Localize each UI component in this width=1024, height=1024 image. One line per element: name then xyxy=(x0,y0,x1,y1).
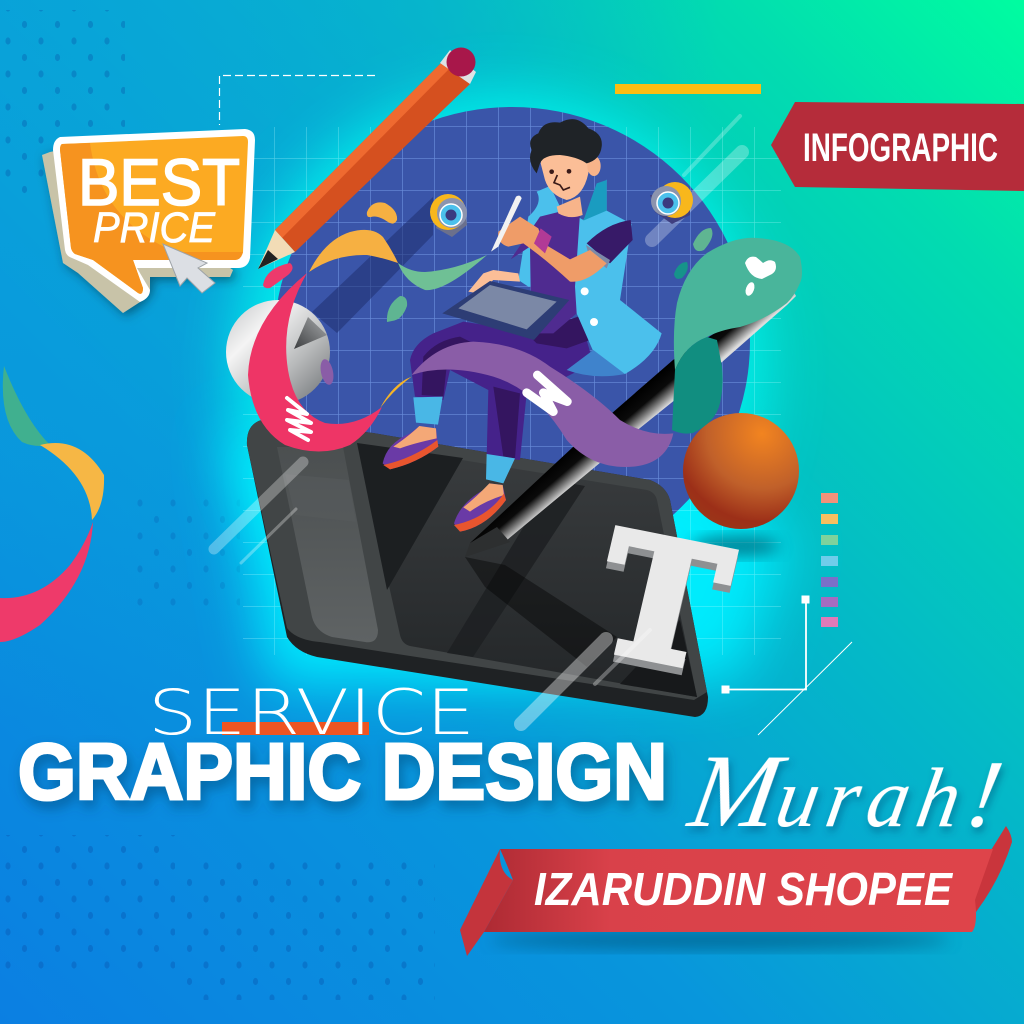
character: designer sitting with tablet xyxy=(383,119,662,532)
ribbon left fold xyxy=(460,849,513,956)
orange ball xyxy=(683,413,799,556)
wristband xyxy=(534,228,552,253)
purple ribbon with white mark xyxy=(380,342,673,467)
shoe soles xyxy=(383,440,506,532)
pencil long shadow xyxy=(312,197,433,333)
jacket xyxy=(518,179,662,374)
hair xyxy=(530,119,602,173)
translucent diagonal bars xyxy=(652,116,742,240)
jacket lower shade xyxy=(567,350,625,376)
screen xyxy=(357,443,697,697)
icon: eye left xyxy=(430,194,467,237)
green dots xyxy=(387,228,712,322)
ribbon main band xyxy=(484,849,993,932)
icon: pencil xyxy=(258,48,476,269)
head xyxy=(541,143,589,200)
jacket buttons xyxy=(581,287,598,326)
yellow ribbon xyxy=(309,230,398,272)
badge orange face xyxy=(60,136,248,294)
3D letter T: T xyxy=(580,495,744,708)
shoe skin top xyxy=(393,426,504,512)
screen dark diagonal xyxy=(447,480,585,657)
ribbon right fold xyxy=(960,826,1012,912)
left arm on tablet xyxy=(468,270,520,293)
left panel xyxy=(277,447,378,642)
script word: murah: Murah! xyxy=(680,734,1012,849)
badge: best price: BEST xyxy=(78,145,240,219)
heading: graphic design: GRAPHIC DESIGN xyxy=(18,727,667,816)
translucent bars over tablet xyxy=(214,462,650,724)
ear xyxy=(587,156,601,176)
small tablet xyxy=(442,281,569,340)
green blob xyxy=(672,238,802,434)
grid backdrop xyxy=(243,127,781,655)
dashed corner guide xyxy=(220,76,375,125)
teal dot xyxy=(674,262,688,279)
arm with hand xyxy=(498,217,607,282)
drawing tablet xyxy=(247,420,708,717)
pink ribbon xyxy=(248,273,382,452)
pink blob xyxy=(263,263,293,288)
cyan glow behind artwork xyxy=(225,92,790,685)
badge white outline xyxy=(53,129,255,302)
heading: service: SERVICE xyxy=(148,676,475,749)
jacket collar shade xyxy=(583,180,607,221)
icon: eye right xyxy=(650,182,693,224)
shirt xyxy=(511,212,580,333)
left decorative ribbon xyxy=(0,366,104,642)
large digital pen xyxy=(465,285,796,557)
icon: cursor arrow xyxy=(163,244,215,293)
purple accent xyxy=(318,358,336,386)
green ribbon xyxy=(398,255,487,290)
3D letter T: T xyxy=(579,502,743,715)
corner guide lines xyxy=(722,596,852,735)
shoes xyxy=(383,426,506,532)
blue circle backdrop xyxy=(278,107,750,515)
screen lower corner xyxy=(620,620,697,697)
gray sphere xyxy=(226,300,330,404)
colorful ribbons and shapes xyxy=(248,202,712,452)
trousers shading xyxy=(422,313,590,458)
badge: best price: PRICE xyxy=(93,204,216,252)
trouser cuffs xyxy=(413,397,515,483)
orange blob xyxy=(367,202,397,224)
trousers xyxy=(410,322,593,460)
ribbon: izaruddin shopee: IZARUDDIN SHOPEE xyxy=(534,863,953,915)
face: eyes and mouth xyxy=(549,169,571,190)
ribbon: izaruddin shopee xyxy=(460,826,1012,956)
neck xyxy=(557,197,583,217)
white pink-ribbon mark xyxy=(287,398,311,440)
sleeve xyxy=(587,220,633,263)
left panel upper stripe xyxy=(285,474,356,522)
screen dark triangle xyxy=(357,443,463,590)
dotted background patterns xyxy=(0,10,435,1000)
badge: best price xyxy=(42,129,255,313)
yellow accent bar xyxy=(615,84,761,94)
badge darker band xyxy=(60,143,243,294)
badge beige backing xyxy=(42,150,233,313)
pen shadow on screen xyxy=(465,557,617,667)
stylus xyxy=(491,196,522,252)
small tablet screen xyxy=(458,285,557,329)
color swatch column xyxy=(821,493,838,627)
infographic banner xyxy=(771,102,1024,191)
sleeve cuff xyxy=(586,245,610,268)
